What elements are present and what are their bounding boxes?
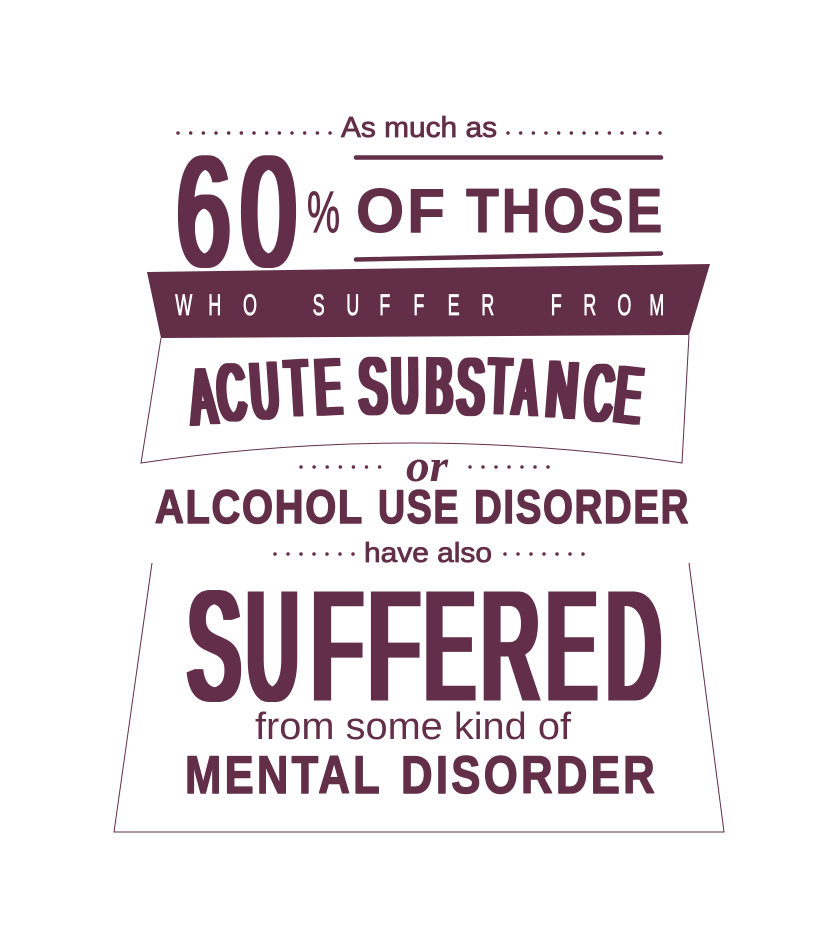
heading: acute substance: S [358, 341, 387, 431]
heading: acute substance: T [487, 341, 512, 431]
heading: alcohol use disorder: ALCOHOL [155, 480, 364, 533]
heading: acute substance: C [581, 347, 617, 439]
heading: alcohol use disorder: USE [378, 480, 460, 533]
heading: acute substance: T [284, 343, 310, 433]
panel outline: suffered [114, 563, 724, 832]
intro line: as much as: As much as [341, 112, 497, 144]
heading: acute substance [187, 341, 646, 442]
heading: mental disorder: DISORDER [401, 746, 658, 805]
heading: suffered: F [312, 560, 362, 732]
heading: acute substance: U [248, 345, 281, 436]
big statistic: 60% [177, 125, 340, 298]
heading: acute substance: S [457, 342, 485, 432]
banner: who suffer from [147, 264, 710, 338]
heading: suffered: R [482, 560, 539, 732]
text: from some kind of: from some kind of [255, 706, 571, 748]
heading: of those [356, 158, 665, 260]
heading: alcohol use disorder: DISORDER [474, 480, 690, 533]
heading: mental disorder [185, 746, 658, 805]
heading: suffered: E [547, 560, 596, 732]
heading: acute substance: E [611, 349, 646, 441]
heading: acute substance: C [214, 347, 248, 438]
infographic: D [607, 560, 660, 732]
banner: who suffer from: WHO SUFFER FROM [175, 290, 664, 322]
heading: acute substance: E [313, 342, 343, 432]
heading: suffered: U [247, 560, 298, 732]
heading: alcohol use disorder [155, 480, 690, 533]
big statistic: 60%: 0 [241, 125, 296, 298]
heading: acute substance: A [512, 342, 540, 432]
heading: acute substance: B [426, 341, 453, 430]
big statistic: 60%: 6 [177, 125, 230, 298]
heading: suffered: S [188, 560, 240, 732]
connector: or: or [406, 440, 449, 491]
panel outline: acute substance [141, 335, 689, 463]
heading: suffered: F [369, 560, 419, 732]
heading: suffered: E [425, 560, 474, 732]
heading: suffered [188, 560, 660, 732]
heading: of those: THOSE [466, 177, 665, 246]
heading: acute substance: N [544, 344, 581, 435]
heading: acute substance: A [187, 351, 219, 442]
heading: of those: OF [356, 177, 448, 246]
heading: acute substance: U [391, 341, 418, 430]
connector: have also: have also [364, 537, 492, 568]
big statistic: 60%: % [307, 180, 340, 245]
heading: mental disorder: MENTAL [185, 746, 383, 805]
